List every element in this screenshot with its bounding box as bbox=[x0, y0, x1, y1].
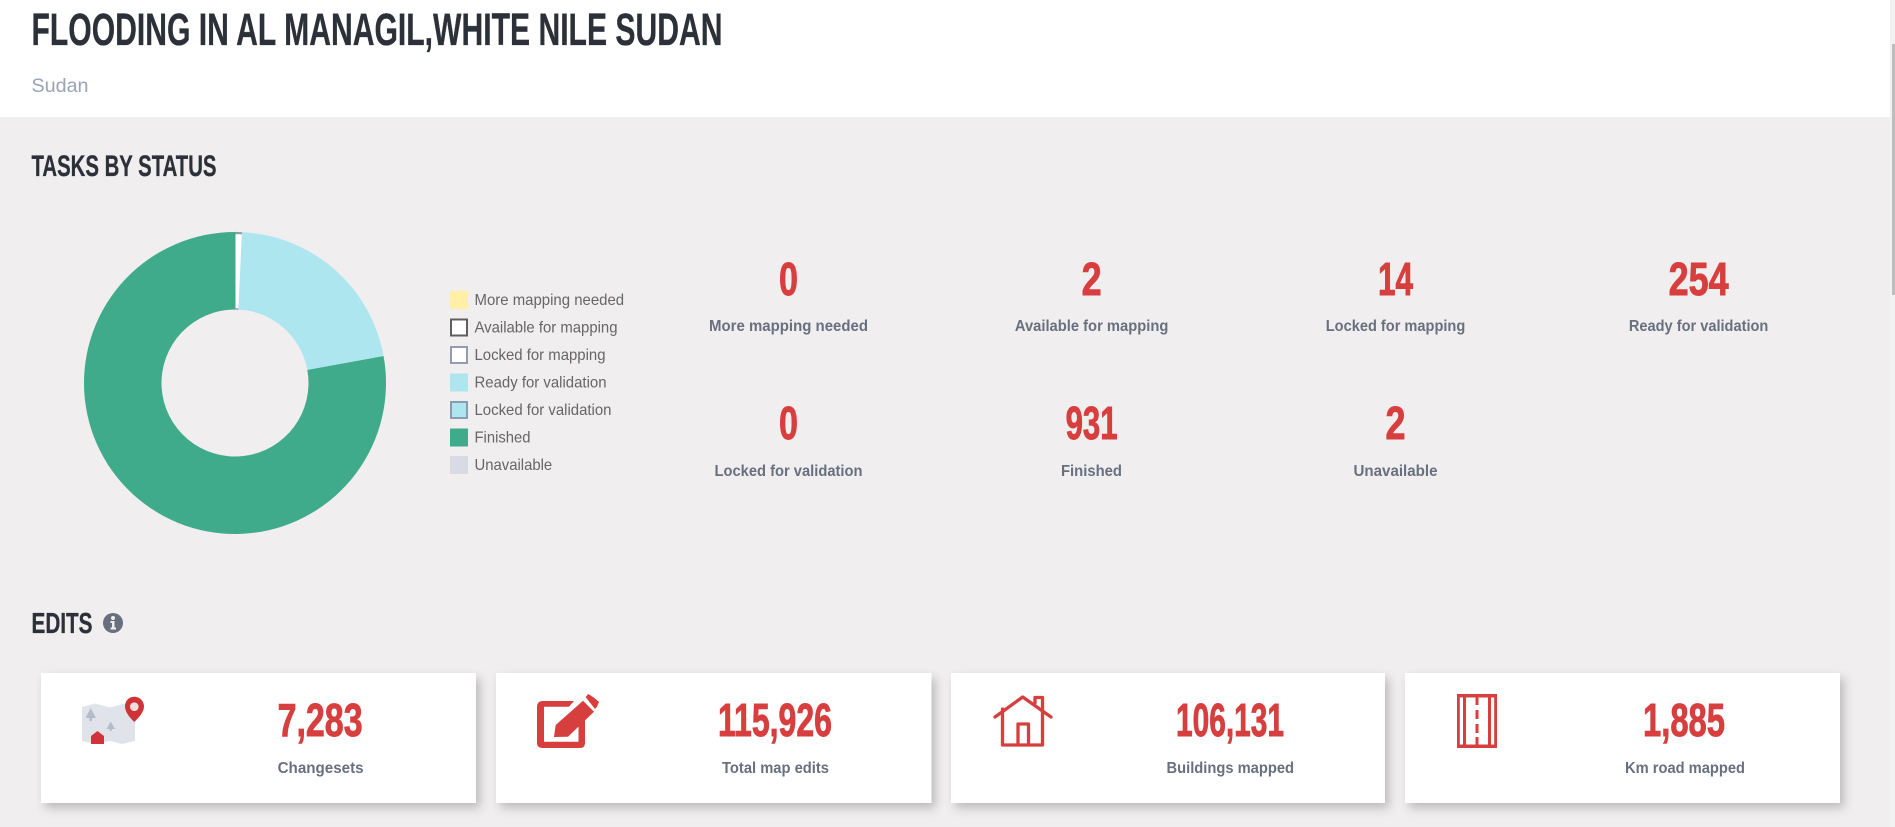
stat: more mapping needed: 0 bbox=[779, 253, 798, 305]
card: km road mapped bbox=[1405, 673, 1840, 803]
chart legend bbox=[450, 291, 624, 474]
stat: more mapping needed: More mapping needed bbox=[709, 318, 868, 335]
title: FLOODING IN AL MANAGIL,WHITE NILE SUDAN bbox=[32, 4, 722, 55]
panel: tasks by status bbox=[32, 150, 1768, 534]
stat: locked for mapping: 14 bbox=[1378, 253, 1413, 305]
card: changesets: 7,283 bbox=[278, 694, 363, 746]
chart legend: Unavailable bbox=[474, 457, 552, 474]
icon: road bbox=[1457, 694, 1497, 748]
card: total map edits: 115,926 bbox=[718, 694, 832, 746]
card: buildings mapped: Buildings mapped bbox=[1166, 760, 1294, 777]
stat: locked for mapping bbox=[1326, 253, 1465, 335]
stat: ready for validation: Ready for validation bbox=[1629, 318, 1768, 335]
panel: edits bbox=[32, 608, 1840, 803]
icon: pencil and square bbox=[537, 694, 599, 748]
stat: finished bbox=[1061, 397, 1122, 480]
icon: house bbox=[995, 697, 1051, 745]
icon: map with pin bbox=[82, 697, 144, 744]
chart legend: Locked for mapping bbox=[474, 347, 606, 364]
page header bbox=[0, 0, 1890, 117]
chart legend: More mapping needed bbox=[474, 292, 624, 309]
donut chart bbox=[84, 232, 386, 534]
stat: ready for validation: 254 bbox=[1669, 253, 1729, 305]
stat: more mapping needed bbox=[709, 253, 868, 335]
stat: locked for validation bbox=[714, 397, 862, 480]
chart legend: Locked for validation bbox=[474, 402, 612, 419]
card: changesets: Changesets bbox=[278, 760, 364, 777]
chart legend: Ready for validation bbox=[474, 374, 606, 392]
card: total map edits bbox=[496, 673, 932, 803]
subtitle: Sudan bbox=[32, 75, 88, 97]
stat: locked for validation: 0 bbox=[779, 397, 798, 449]
card: total map edits: Total map edits bbox=[722, 760, 829, 777]
stat: locked for validation: Locked for validation bbox=[714, 463, 862, 480]
chart legend: Available for mapping bbox=[474, 320, 618, 336]
heading: tasks by status: TASKS BY STATUS bbox=[32, 150, 216, 183]
stat: available for mapping: Available for mapping bbox=[1015, 318, 1168, 335]
stat: locked for mapping: Locked for mapping bbox=[1326, 318, 1465, 335]
scrollbar bbox=[1890, 0, 1895, 827]
card: changesets bbox=[41, 673, 476, 803]
chart legend: Finished bbox=[474, 430, 530, 446]
stat: unavailable bbox=[1354, 397, 1438, 480]
stat: unavailable: 2 bbox=[1386, 397, 1406, 449]
card: km road mapped: Km road mapped bbox=[1625, 760, 1745, 777]
stat: finished: Finished bbox=[1061, 463, 1122, 480]
heading: edits: EDITS bbox=[32, 608, 92, 640]
stat: unavailable: Unavailable bbox=[1354, 463, 1438, 480]
card: km road mapped: 1,885 bbox=[1643, 694, 1725, 746]
card: buildings mapped bbox=[951, 673, 1385, 803]
card: buildings mapped: 106,131 bbox=[1176, 694, 1284, 746]
stat: ready for validation bbox=[1629, 253, 1768, 335]
stat: available for mapping: 2 bbox=[1082, 253, 1102, 305]
icon: info bbox=[103, 613, 123, 633]
stat: finished: 931 bbox=[1066, 397, 1118, 449]
stat: available for mapping bbox=[1015, 253, 1168, 335]
